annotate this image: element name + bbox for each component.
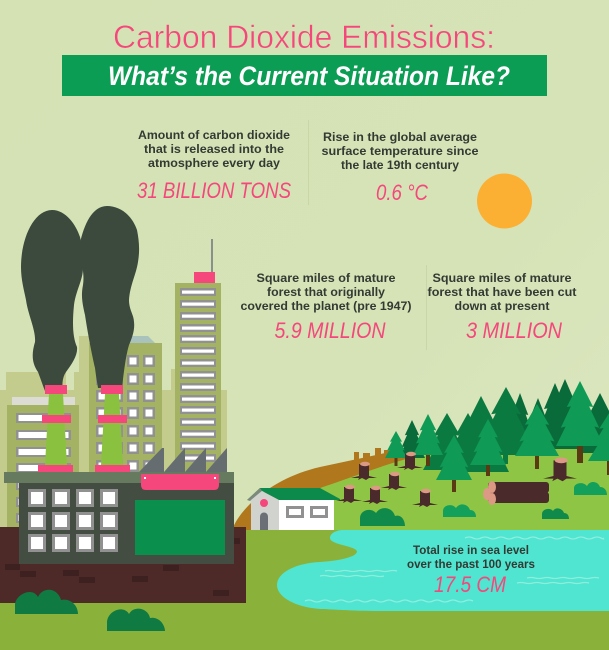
stat: carbon dioxide released: 31 BILLION TONS [137, 178, 291, 203]
banner [62, 55, 547, 96]
stat: forest cut down: down at present [454, 299, 550, 313]
factory [4, 448, 234, 564]
hill bushes [360, 482, 607, 526]
stat: sea level rise: 17.5 CM [434, 572, 507, 597]
fence stumps [354, 448, 389, 461]
stat: sea level rise: Total rise in sea level [413, 543, 529, 557]
stat: original forest: Square miles of mature [256, 271, 396, 285]
forest [385, 379, 609, 492]
lake [277, 530, 609, 611]
dirt ground under factory [0, 527, 246, 603]
stat: carbon dioxide released: that is released into the [144, 142, 284, 156]
cut logs [483, 481, 549, 505]
chimney 2 [95, 385, 130, 473]
green hill [320, 442, 609, 531]
stat: forest cut down: Square miles of mature [432, 271, 572, 285]
banner: What’s the Current Situation Like? [108, 61, 510, 91]
brown hill [232, 452, 410, 530]
stat: carbon dioxide released: atmosphere every day [148, 156, 280, 170]
house [247, 488, 340, 530]
stat: temperature rise: 0.6 °C [376, 180, 428, 205]
chimney 1 [38, 385, 73, 473]
title: Carbon Dioxide Emissions: [113, 19, 495, 55]
ground [0, 530, 609, 650]
bushes [15, 590, 165, 631]
stat: original forest: covered the planet (pre 1947) [240, 299, 412, 313]
stat: sea level rise [407, 543, 535, 597]
stat: carbon dioxide released: Amount of carbon dioxide [138, 128, 290, 142]
city buildings [0, 239, 227, 530]
stat: temperature rise: surface temperature since [322, 144, 479, 158]
smoke [21, 206, 139, 391]
tree stumps [336, 452, 577, 507]
stat: sea level rise: over the past 100 years [407, 557, 535, 571]
stat: temperature rise: Rise in the global average [323, 130, 477, 144]
stat: temperature rise: the late 19th century [341, 158, 459, 172]
stat: forest cut down: 3 MILLION [466, 318, 562, 343]
stat: original forest: forest that originally [267, 285, 385, 299]
stat: original forest [240, 271, 412, 343]
stat: temperature rise [322, 130, 479, 205]
stat: forest cut down: forest that have been cut [428, 285, 577, 299]
stat: forest cut down [428, 271, 577, 343]
icon: sun [477, 174, 532, 228]
stat: carbon dioxide released [137, 128, 291, 203]
stat: original forest: 5.9 MILLION [274, 318, 386, 343]
